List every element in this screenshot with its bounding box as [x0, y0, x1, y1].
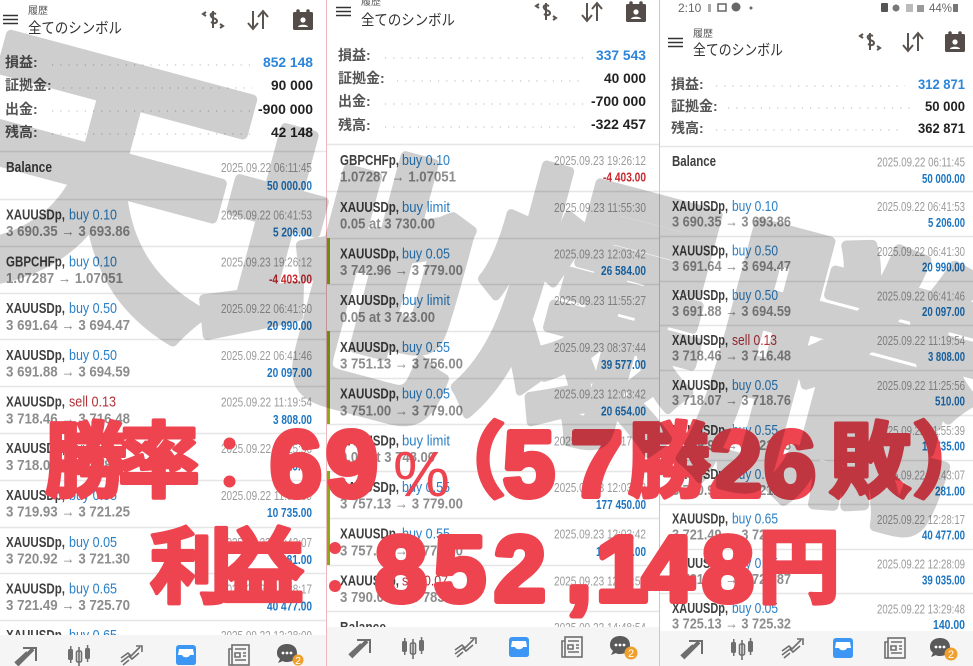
row: XAUUSDp, — [672, 422, 728, 439]
row: 3 725.13 → 3 725.32 — [672, 616, 791, 632]
row — [672, 332, 965, 364]
row: buy 0.05 — [732, 600, 778, 617]
summary stats middle: 損益: — [338, 47, 371, 63]
row: XAUUSDp, — [6, 534, 65, 551]
row: XAUUSDp, — [672, 510, 728, 528]
row: XAUUSDp, — [672, 600, 728, 617]
summary stats left: 90 000 — [271, 77, 313, 93]
row — [6, 206, 312, 240]
summary stats middle: 40 000 — [604, 70, 646, 86]
row: 510.00 — [935, 394, 965, 408]
status bar: 44% — [929, 3, 952, 15]
row — [340, 339, 646, 372]
row — [6, 487, 312, 520]
summary stats left: 852 148 — [263, 54, 313, 70]
row: 177 450.00 — [596, 498, 646, 512]
row: 6 365.00 — [607, 592, 646, 606]
row: 3 720.92 → 3 721.30 — [6, 550, 130, 568]
row: sell 0.13 — [69, 394, 116, 410]
red headline: win rate: 69 — [270, 412, 378, 516]
row: 2025.09.22 06:41:46 — [221, 349, 312, 363]
red headline: win rate: 26 — [710, 412, 816, 516]
row list middle — [326, 144, 659, 636]
bottom nav middle — [326, 627, 659, 666]
row: buy 0.55 — [402, 526, 450, 542]
summary stats left: 証拠金: — [5, 77, 52, 93]
red headline: win rate: （ — [424, 395, 506, 514]
row: XAUUSDp, — [340, 292, 399, 309]
row: 2025.09.23 19:26:12 — [554, 154, 646, 168]
row: XAUUSDp, — [6, 347, 65, 364]
summary stats right: 312 871 — [918, 76, 965, 92]
row: XAUUSDp, — [6, 206, 65, 224]
status bar — [678, 1, 958, 15]
row: 1.07287 → 1.07051 — [6, 270, 123, 287]
row: GBPCHFp, — [6, 254, 65, 270]
row: 2025.09.23 12:03:42 — [554, 248, 646, 262]
row: 2025.09.23 11:55:27 — [554, 294, 646, 308]
row list left — [0, 152, 326, 644]
row: 2025.09.23 08:37:44 — [554, 341, 646, 355]
row: 5 206.00 — [273, 226, 312, 240]
row: 3 691.64 → 3 694.47 — [672, 258, 791, 275]
row: 3 742.96 → 3 779.00 — [340, 262, 463, 279]
row: XAUUSDp, — [340, 479, 399, 496]
row: buy 0.05 — [732, 377, 778, 394]
summary stats right: 損益: — [671, 76, 704, 92]
red headline: win rate: 勝率 — [45, 395, 200, 514]
red headline: win rate: % — [393, 438, 450, 510]
summary stats left: 42 148 — [271, 124, 313, 140]
row — [672, 153, 965, 186]
row — [672, 510, 965, 544]
row — [672, 287, 965, 320]
row: buy 0.65 — [732, 510, 778, 528]
row: buy 0.05 — [402, 246, 450, 262]
row: buy 0.65 — [69, 580, 117, 598]
row — [340, 526, 646, 560]
row: 2025.09.23 11:17:02 — [554, 434, 646, 448]
row: 0.05 at 3 723.00 — [340, 309, 435, 326]
row: 2025.09.23 12:03:42 — [554, 388, 646, 402]
row: 3 719.93 → 3 721.25 — [672, 437, 791, 454]
row: buy 0.10 — [732, 198, 778, 215]
row — [340, 572, 646, 606]
row: 2025.09.23 14:48:54 — [554, 621, 646, 635]
row: XAUUSDp, — [672, 198, 728, 215]
summary stats right — [671, 76, 965, 136]
row: 40 477.00 — [267, 600, 312, 614]
row status bars — [326, 238, 330, 565]
row — [340, 292, 646, 326]
red headline: win rate: 敗 — [829, 395, 911, 514]
row: XAUUSDp, — [340, 386, 399, 402]
row — [672, 377, 965, 409]
panel dividers — [326, 0, 660, 666]
row — [340, 152, 646, 186]
heading middle — [361, 0, 455, 29]
row: XAUUSDp, — [672, 287, 728, 304]
row — [6, 440, 312, 474]
hamburger icon right — [668, 38, 683, 46]
row — [6, 394, 312, 428]
row: 3 757.39 → 3 779.00 — [340, 542, 463, 560]
row: XAUUSDp, — [6, 580, 65, 598]
row: XAUUSDp, — [672, 377, 728, 394]
row — [340, 619, 646, 636]
row: XAUUSDp, — [672, 466, 728, 483]
row: Balance — [6, 159, 52, 176]
bottom nav left — [0, 635, 326, 666]
summary stats right: 50 000 — [925, 98, 965, 114]
row: 3 720.92 → 3 721.30 — [672, 482, 791, 499]
summary stats middle: 証拠金: — [338, 70, 385, 86]
row: buy limit — [402, 199, 451, 216]
row: Balance — [340, 619, 386, 636]
row: sell 0.07 — [402, 572, 448, 590]
row: 2025.09.22 06:41:53 — [221, 208, 312, 222]
row: 20 654.00 — [601, 404, 646, 418]
row — [672, 242, 965, 275]
row: 3 691.88 → 3 694.59 — [6, 364, 130, 380]
row: 2025.09.22 11:25:56 — [221, 442, 312, 456]
row — [672, 600, 965, 632]
row: buy 0.10 — [402, 152, 450, 169]
row — [672, 466, 965, 499]
red headline: profit: 852,148 — [375, 517, 754, 621]
row: buy 0.55 — [402, 339, 450, 356]
row: 175 341.00 — [596, 545, 646, 559]
row: 3 808.00 — [273, 413, 312, 427]
summary stats right: 362 871 — [918, 120, 965, 136]
row — [6, 159, 312, 193]
row: buy 0.10 — [69, 206, 117, 224]
row: buy 0.05 — [402, 386, 450, 402]
row: 3 719.93 → 3 721.25 — [6, 504, 130, 520]
heading left: 全てのシンボル — [28, 20, 122, 37]
row — [340, 432, 646, 466]
row: buy 0.05 — [732, 466, 778, 483]
row: XAUUSDp, — [6, 300, 65, 317]
row: buy 0.65 — [69, 627, 117, 644]
row: buy 0.50 — [69, 300, 117, 317]
summary stats left: 出金: — [5, 101, 38, 117]
row — [6, 254, 312, 287]
row: -4 403.00 — [603, 170, 646, 184]
row: XAUUSDp, — [672, 332, 728, 349]
row: 281.00 — [935, 484, 965, 498]
row: 3 790.00 → 3 783.84 — [340, 589, 464, 606]
row — [6, 300, 312, 334]
row: 3 718.46 → 3 716.48 — [6, 410, 130, 428]
row: buy 0.55 — [402, 479, 450, 496]
row: Balance — [672, 153, 716, 170]
row: 0.05 at 3 748.00 — [340, 449, 435, 466]
watermark: 爆 — [428, 68, 763, 522]
row: buy 0.05 — [69, 534, 117, 551]
row: 1.07287 → 1.07051 — [340, 168, 456, 186]
row: XAUUSDp, — [340, 199, 399, 216]
row — [340, 386, 646, 420]
summary stats middle: -700 000 — [591, 93, 646, 109]
row: 510.00 — [281, 460, 312, 474]
row: 2025.09.23 12:03:42 — [554, 528, 646, 542]
row: 3 751.00 → 3 779.00 — [340, 402, 463, 420]
row: 140.00 — [933, 618, 965, 632]
row: 0.05 at 3 730.00 — [340, 216, 435, 232]
row: 3 718.07 → 3 718.76 — [672, 392, 791, 409]
row: 2025.09.22 11:55:39 — [221, 489, 312, 503]
row: 3 690.35 → 3 693.86 — [6, 223, 130, 240]
row: 2025.09.22 06:11:45 — [221, 161, 312, 175]
row: 3 721.81 → 3 725.87 — [672, 571, 791, 588]
row — [6, 534, 312, 568]
row: 281.00 — [281, 553, 312, 567]
summary stats right: 証拠金: — [671, 98, 718, 114]
row: 2025.09.22 06:41:30 — [221, 302, 312, 316]
row: XAUUSDp, — [340, 572, 399, 590]
panel: right history screen — [659, 0, 973, 666]
summary stats left: -900 000 — [258, 101, 313, 117]
row: buy 0.50 — [69, 347, 117, 364]
row: XAUUSDp, — [340, 246, 399, 262]
row: XAUUSDp, — [672, 555, 728, 572]
row: 2025.09.22 12:43:07 — [221, 536, 312, 550]
row: buy 0.50 — [732, 287, 778, 304]
bottom nav right: 2 — [948, 649, 954, 661]
row: 2025.09.22 11:19:54 — [221, 396, 312, 410]
row — [672, 422, 965, 454]
bottom nav middle: 2 — [628, 648, 634, 660]
row — [672, 198, 965, 230]
row: buy limit — [402, 292, 451, 309]
row: 39 577.00 — [601, 358, 646, 372]
row: XAUUSDp, — [340, 526, 399, 542]
row — [672, 555, 965, 588]
row: 3 690.35 → 3 693.86 — [672, 214, 791, 230]
summary stats middle: 337 543 — [596, 47, 646, 63]
row: -4 403.00 — [269, 272, 312, 286]
bottom nav right — [659, 631, 973, 666]
red headline: profit: 利益 — [150, 501, 304, 620]
status bar: 2:10 — [678, 1, 702, 15]
row — [6, 347, 312, 380]
row: 3 718.07 → 3 718.76 — [6, 457, 130, 474]
heading left — [28, 5, 122, 37]
row: GBPCHFp, — [340, 152, 399, 169]
row: 2025.09.23 19:26:12 — [221, 256, 312, 270]
row — [340, 199, 646, 232]
heading left: 履歴 — [28, 5, 48, 17]
row: XAUUSDp, — [6, 394, 65, 410]
row: 3 751.13 → 3 756.00 — [340, 356, 463, 372]
row: 3 757.13 → 3 779.00 — [340, 496, 463, 512]
row: XAUUSDp, — [340, 432, 399, 450]
row: 2025.09.22 12:28:09 — [221, 629, 312, 643]
row: 3 721.49 → 3 725.70 — [672, 526, 791, 544]
red headline: profit — [150, 501, 840, 621]
row: buy 0.65 — [732, 555, 778, 572]
toolbar icons left — [203, 9, 313, 30]
heading right: 全てのシンボル — [693, 42, 783, 59]
row: 20 097.00 — [267, 366, 312, 380]
row: buy 0.55 — [732, 422, 778, 439]
hamburger icon middle — [336, 8, 351, 16]
row: 3 691.88 → 3 694.59 — [672, 303, 791, 320]
row: XAUUSDp, — [6, 440, 65, 457]
row: 3 721.49 → 3 725.70 — [6, 597, 130, 614]
row: 26 584.00 — [601, 264, 646, 278]
row: 2025.09.22 12:28:17 — [221, 582, 312, 596]
summary stats right: 残高: — [671, 120, 704, 136]
toolbar icons right — [860, 31, 965, 52]
row: 50 000.00 — [267, 179, 312, 193]
row: 20 990.00 — [267, 319, 312, 333]
watermark: 地 — [165, 31, 525, 491]
summary stats left — [5, 54, 313, 140]
row — [6, 627, 312, 644]
red headline: win rate: 57 — [503, 412, 623, 516]
panel: middle history screen — [326, 0, 659, 666]
row: 10 735.00 — [267, 506, 312, 520]
row: buy 0.10 — [69, 254, 117, 270]
red headline: win rate: 勝 — [628, 395, 710, 514]
row: 2025.09.23 12:03:42 — [554, 481, 646, 495]
heading right: 履歴 — [693, 28, 713, 40]
row: XAUUSDp, — [6, 627, 65, 644]
toolbar icons middle — [536, 1, 646, 22]
row: 3 718.46 → 3 716.48 — [672, 348, 791, 364]
row — [340, 246, 646, 279]
summary stats middle: 残高: — [338, 117, 371, 133]
row: XAUUSDp, — [672, 242, 728, 260]
summary stats left: 残高: — [5, 124, 38, 140]
hamburger icon left — [3, 16, 18, 24]
summary stats middle — [338, 47, 646, 133]
row — [6, 580, 312, 614]
summary stats left: 損益: — [5, 54, 38, 70]
row: sell 0.13 — [732, 332, 777, 349]
row — [340, 479, 646, 512]
heading middle: 全てのシンボル — [361, 12, 455, 29]
row: buy 0.55 — [69, 487, 117, 504]
row: XAUUSDp, — [340, 339, 399, 356]
row list right — [659, 146, 973, 632]
heading right — [693, 28, 783, 59]
row: buy 0.05 — [69, 440, 117, 457]
panel: left history screen — [0, 5, 326, 666]
row: buy limit — [402, 432, 451, 450]
red headline: win rate — [45, 395, 973, 516]
row: 3 691.64 → 3 694.47 — [6, 317, 130, 334]
summary stats middle: -322 457 — [591, 116, 646, 132]
red headline: profit: 円 — [758, 501, 840, 620]
row: XAUUSDp, — [6, 487, 65, 504]
row: 2025.09.23 11:55:30 — [554, 201, 646, 215]
row: 2025.09.23 12:54:51 — [554, 574, 646, 588]
summary stats middle: 出金: — [338, 93, 371, 109]
row: buy 0.50 — [732, 242, 778, 260]
